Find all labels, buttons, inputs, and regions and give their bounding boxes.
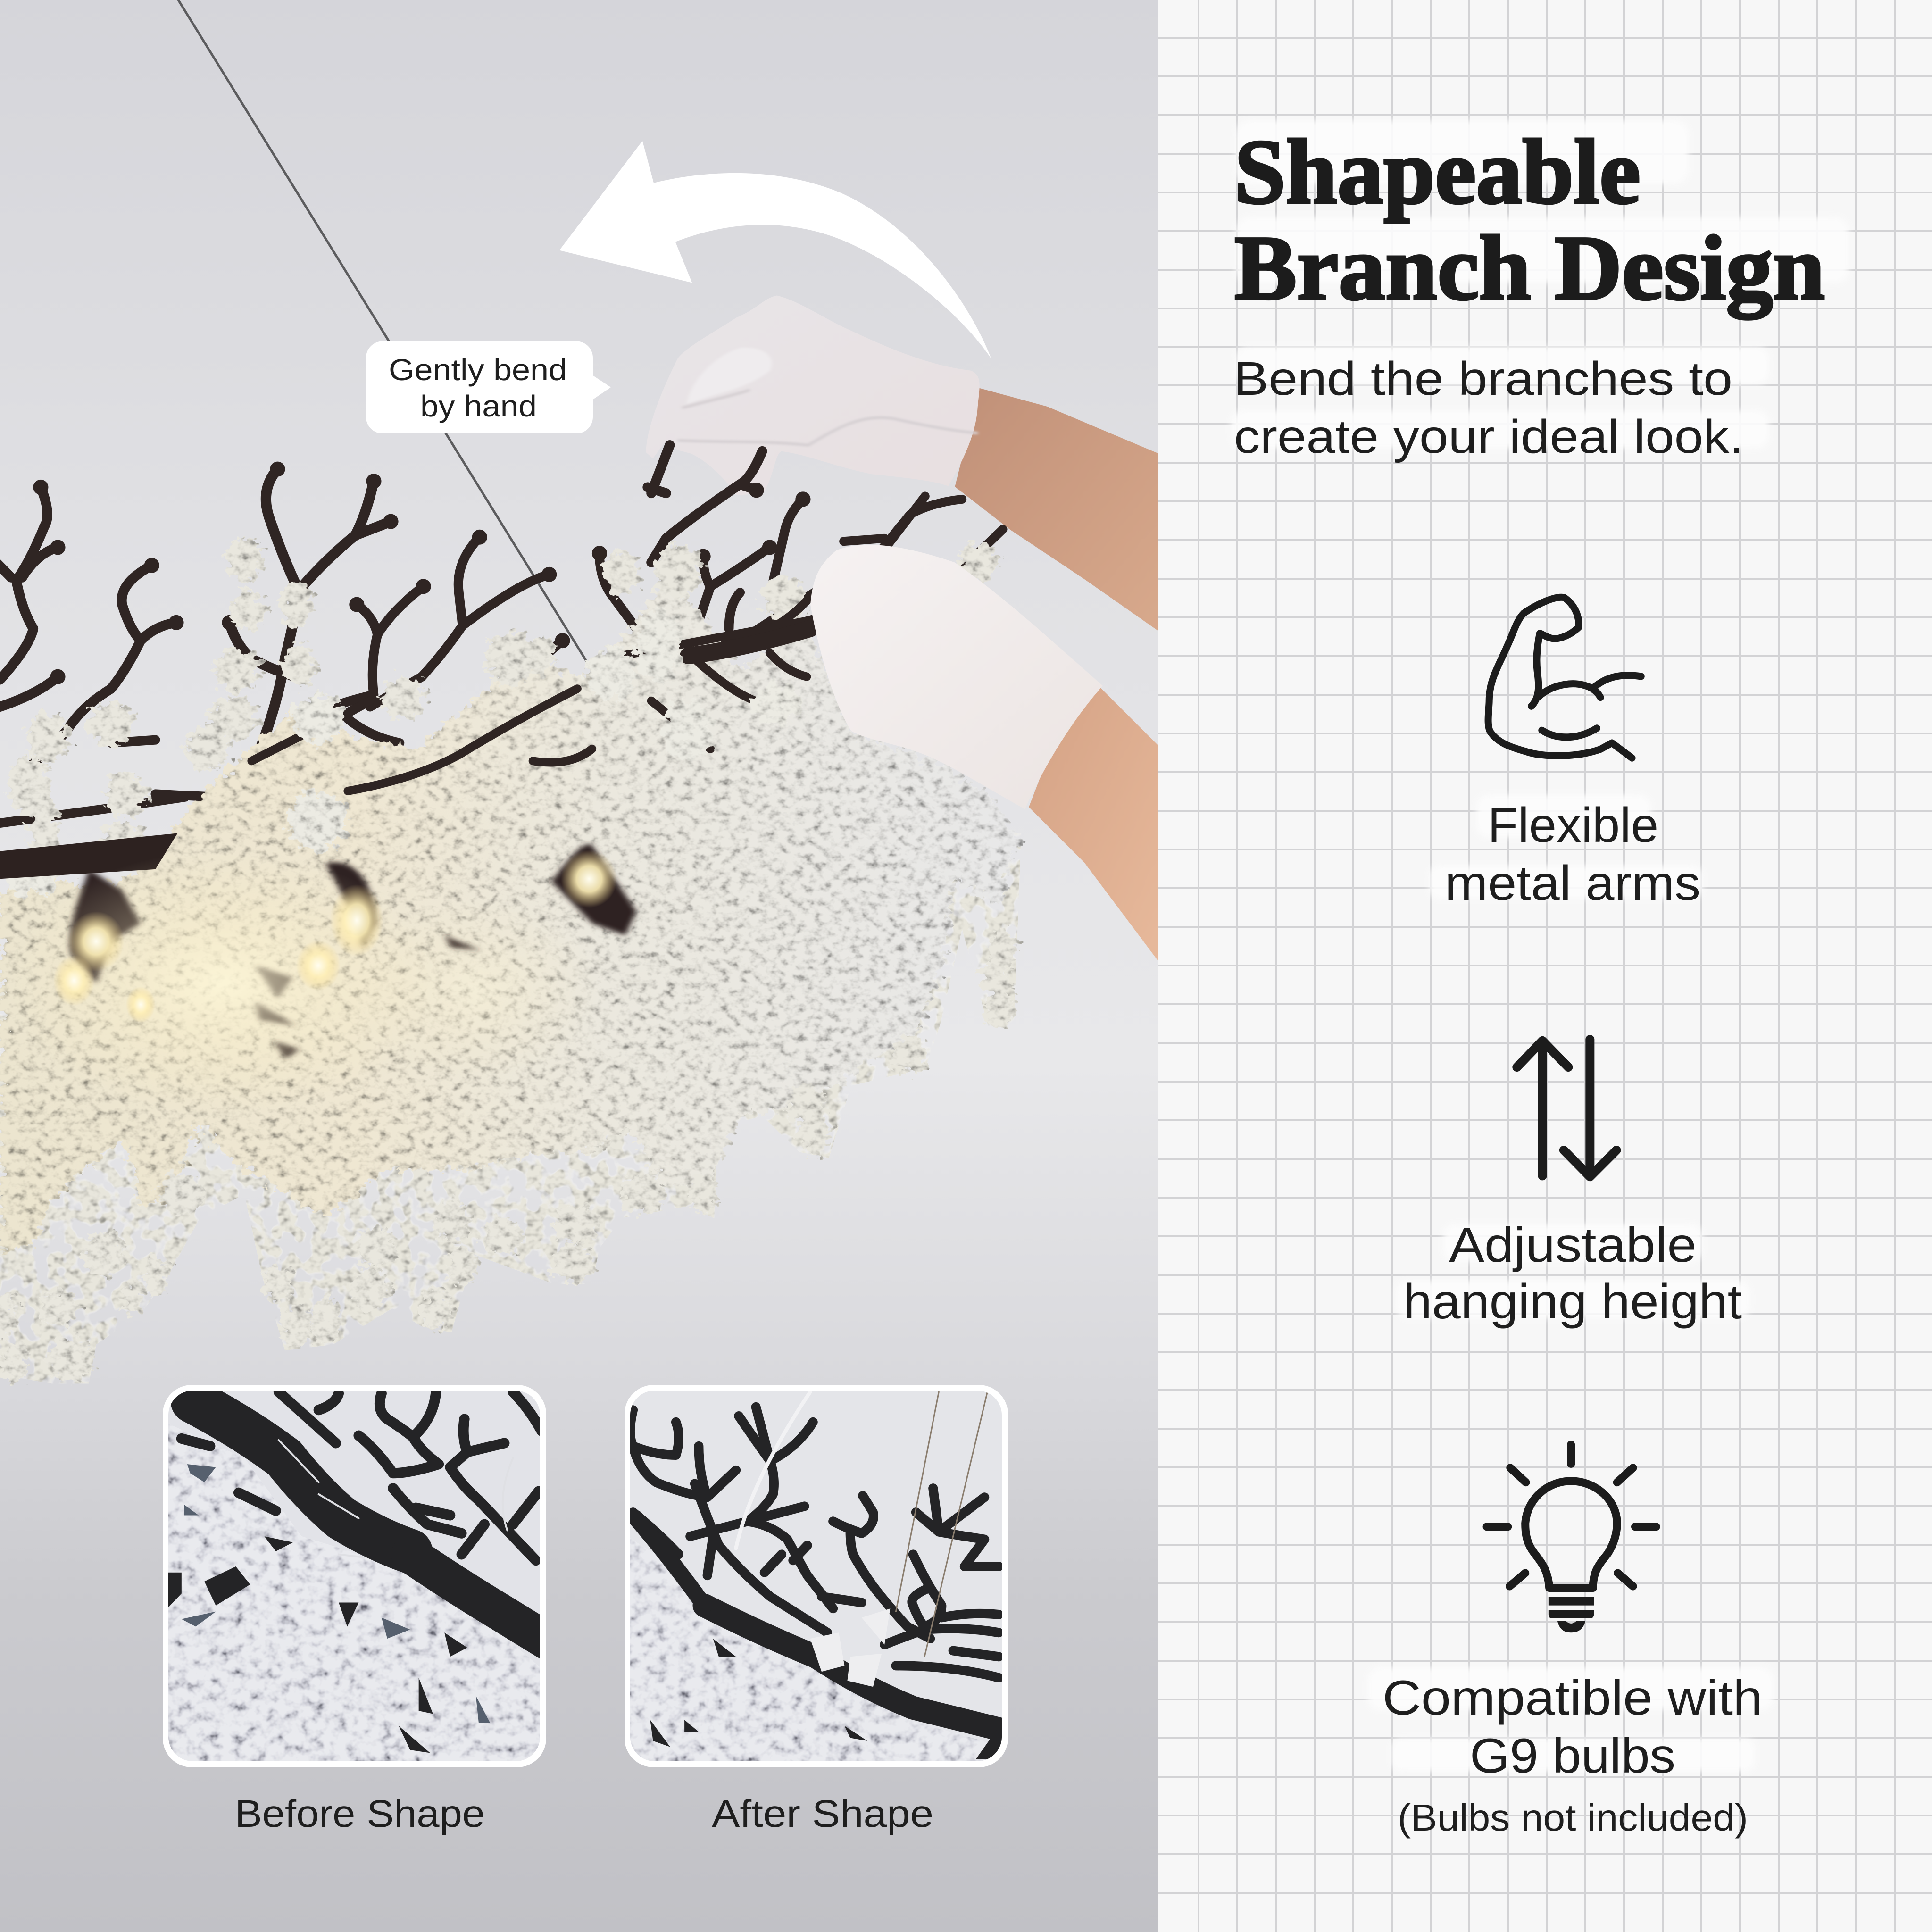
inset: before shape: [163, 1385, 553, 1767]
heading line 1: Shapeable: [1234, 121, 1641, 223]
hanging wire: [178, 0, 595, 675]
subheading: [1233, 352, 1744, 463]
center branches: [229, 469, 391, 761]
panel: product photo: [0, 0, 1158, 1932]
feature label: adjustable hanging height: hanging height: [1403, 1274, 1742, 1329]
crystals in front of branches: [8, 610, 802, 897]
note: bulbs not included: (Bulbs not included): [1398, 1797, 1748, 1839]
heading line 2: Branch Design: [1234, 217, 1825, 319]
feature label: compatible with G9 bulbs: Compatible with: [1382, 1671, 1763, 1725]
glowing bulbs: [8, 850, 617, 1116]
after: branches: [630, 1392, 1010, 1759]
before: thick branches: [167, 1392, 553, 1753]
lower glove: [810, 545, 1103, 809]
feature label: compatible with G9 bulbs: G9 bulbs: [1470, 1729, 1675, 1783]
feature label: adjustable hanging height: [1403, 1218, 1742, 1329]
callout text line 1: Gently bend: [389, 353, 567, 387]
subheading line 2: create your ideal look.: [1234, 410, 1744, 463]
upper glove: [646, 296, 980, 495]
callout text line 2: by hand: [420, 389, 537, 423]
crystal strands: [0, 833, 1021, 1383]
heading: [1234, 121, 1825, 319]
upper forearm: [955, 388, 1158, 631]
caption: after shape: After Shape: [712, 1792, 933, 1835]
subheading line 1: Bend the branches to: [1233, 352, 1732, 405]
icon: flexed arm: [1488, 597, 1641, 758]
drooping crystal clusters: [0, 538, 1016, 1382]
icon: light bulb: [1487, 1445, 1656, 1632]
before: crystals: [164, 1422, 541, 1765]
bulb sockets and dark trunk accents: [0, 833, 636, 1059]
feature label: adjustable hanging height: Adjustable: [1449, 1218, 1697, 1273]
arrow: bend direction: [559, 141, 991, 358]
inset: after shape: [625, 1385, 1010, 1767]
feature label: compatible with G9 bulbs: [1382, 1671, 1763, 1839]
lower forearm: [1029, 684, 1158, 961]
left branches: [0, 487, 58, 708]
panel: features: [1158, 0, 1932, 1932]
callout: gently bend by hand: [366, 341, 611, 433]
branch tip knobs: [41, 469, 803, 677]
branches seen through crystals: [251, 592, 814, 791]
main trunk: [0, 794, 333, 866]
crystal cascade: [0, 538, 1017, 1382]
feature label: flexible metal arms: [1445, 798, 1700, 911]
feature label: flexible metal arms: metal arms: [1445, 856, 1700, 911]
caption: before shape: Before Shape: [235, 1792, 485, 1835]
lamp branches: [0, 445, 1003, 866]
after: crystals: [627, 1536, 1005, 1765]
icon: up and down arrows: [1517, 1040, 1616, 1177]
feature label: flexible metal arms: Flexible: [1488, 798, 1658, 853]
dense crystal mass: [0, 581, 1017, 1254]
right branches held by hand: [648, 445, 762, 562]
